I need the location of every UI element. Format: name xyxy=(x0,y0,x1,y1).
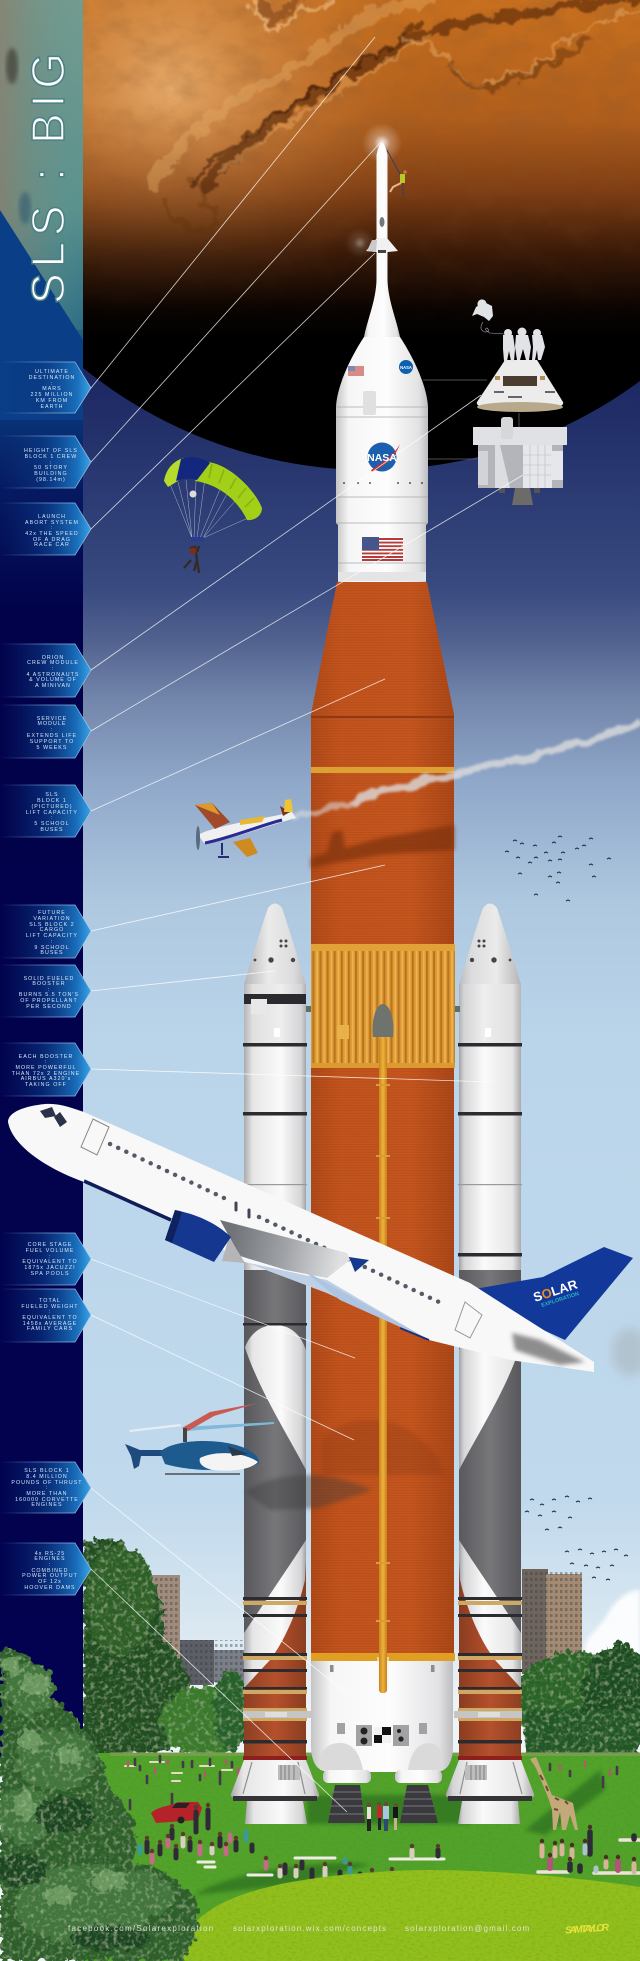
callout: ultimate destination: KM FROM xyxy=(36,398,68,404)
callout: solid fueled booster: BOOSTER xyxy=(32,981,66,987)
callout: solid fueled booster: BURNS 5.5 TON'S xyxy=(19,992,79,998)
callout: total fueled weight: FUELED WEIGHT xyxy=(21,1304,79,1310)
callout: orion crew module: & VOLUME OF xyxy=(29,677,77,683)
callout: launch abort system: RACE CAR xyxy=(34,542,70,548)
footer links: solarxploration.wix.com/concepts xyxy=(233,1924,387,1933)
callout: thrust: : xyxy=(46,1485,48,1491)
callout: solid fueled booster: SOLID FUELED xyxy=(24,976,74,982)
tail fin xyxy=(469,1247,633,1340)
footer links: solarxploration@gmail.com xyxy=(405,1924,530,1933)
callout: each booster: : xyxy=(45,1059,47,1065)
callout: ultimate destination: EARTH xyxy=(40,404,64,410)
tail logo: SOLAR xyxy=(531,1276,580,1305)
distant buildings: right xyxy=(522,1569,582,1674)
callout: launch abort system: : xyxy=(51,525,53,531)
callout: RS-25 engines: ENGINES xyxy=(34,1556,66,1562)
callout: SLS block 1 lift capacity: SLS xyxy=(45,792,59,798)
callout: SLS block 1 lift capacity xyxy=(0,785,91,837)
signature: SAM TAYLOR xyxy=(565,1922,610,1937)
callout: height of SLS: BUILDING xyxy=(34,471,68,477)
foreground tree xyxy=(0,1648,198,1961)
aerobatic plane xyxy=(195,799,296,857)
callout: RS-25 engines: POWER OUTPUT xyxy=(22,1573,78,1579)
small NASA logo: NASA xyxy=(400,365,412,370)
callout: SLS block 1 lift capacity: (PICTURED) xyxy=(31,804,73,810)
callout: thrust: 8.4 MILLION xyxy=(26,1474,68,1480)
large NASA logo: NASA xyxy=(367,452,397,464)
callout: SLS block 1 lift capacity: BLOCK 1 xyxy=(37,798,67,804)
callout: RS-25 engines: : xyxy=(49,1562,51,1568)
plane shadow on core xyxy=(322,1420,445,1475)
booster attachment struts xyxy=(306,1006,460,1012)
gold core band xyxy=(311,1653,455,1661)
callout: height of SLS: : xyxy=(50,460,52,466)
callout: thrust xyxy=(0,1462,91,1513)
sidebar xyxy=(0,0,83,1760)
engine section xyxy=(311,1661,453,1783)
callout: future variation: LIFT CAPACITY xyxy=(26,933,78,939)
callout: ultimate destination: ULTIMATE xyxy=(35,369,69,375)
winglet xyxy=(349,1257,369,1272)
callout: thrust: ENGINES xyxy=(31,1502,63,1508)
callout: launch abort system: OF A DRAG xyxy=(33,537,71,543)
grass field xyxy=(83,1752,640,1961)
helicopter xyxy=(125,1403,274,1474)
callout: ultimate destination: 225 MILLION xyxy=(30,392,74,398)
smoke shadow on core xyxy=(311,825,454,868)
helicopter shadow xyxy=(245,1475,372,1510)
callout: core stage fuel volume: : xyxy=(49,1254,51,1260)
callout: thrust: SLS BLOCK 1 xyxy=(24,1468,70,1474)
giraffe xyxy=(530,1757,578,1830)
service module xyxy=(473,417,567,505)
callout: each booster: EACH BOOSTER xyxy=(19,1054,73,1060)
callout: solid fueled booster: PER SECOND xyxy=(26,1004,72,1010)
booster left black band xyxy=(244,994,306,1014)
astronauts xyxy=(472,299,545,361)
distant buildings: left xyxy=(130,1575,244,1685)
callout: orion crew module: CREW MODULE xyxy=(27,660,79,666)
small NASA logo xyxy=(399,360,413,374)
callout: future variation: SLS BLOCK 2 xyxy=(29,922,75,928)
callout: each booster xyxy=(0,1043,91,1096)
callout: launch abort system xyxy=(0,503,91,555)
callout: SLS block 1 lift capacity: 5 SCHOOL xyxy=(34,821,70,827)
callout: ultimate destination xyxy=(0,362,91,413)
callout: core stage fuel volume: EQUIVALENT TO xyxy=(22,1259,78,1265)
booster right xyxy=(446,904,534,1824)
callout: service module: : xyxy=(51,727,53,733)
background trees xyxy=(83,1540,640,1760)
callout: core stage fuel volume: CORE STAGE xyxy=(28,1242,72,1248)
callout: service module: SUPPORT TO xyxy=(30,739,74,745)
callout: thrust: POUNDS OF THRUST xyxy=(11,1480,83,1486)
callout: solid fueled booster: : xyxy=(48,987,50,993)
callout: each booster: TAKING OFF xyxy=(25,1082,67,1088)
wing xyxy=(220,1220,350,1278)
callout: launch abort system: 42x THE SPEED xyxy=(25,531,79,537)
picnic crowd left xyxy=(140,1805,444,1878)
callout: core stage fuel volume: SPA POOLS xyxy=(30,1271,70,1277)
callout: thrust: MORE THAN xyxy=(26,1491,68,1497)
callout: total fueled weight: TOTAL xyxy=(39,1298,61,1304)
callout: ultimate destination: MARS xyxy=(42,386,62,392)
callout: RS-25 engines: COMBINED xyxy=(32,1568,68,1574)
callout: future variation: : xyxy=(51,939,53,945)
callout: launch abort system: LAUNCH xyxy=(38,514,66,520)
footer links xyxy=(68,1924,530,1933)
launch abort system xyxy=(345,123,402,337)
callout: height of SLS: (98.14m) xyxy=(36,477,66,483)
callout: orion crew module xyxy=(0,644,91,697)
cockpit xyxy=(40,1107,67,1127)
callout: height of SLS: HEIGHT OF SLS xyxy=(24,448,78,454)
callout: service module xyxy=(0,705,91,758)
rocket core stage xyxy=(245,582,455,1823)
distant crowd xyxy=(118,1756,617,1846)
callout: RS-25 engines: 4x RS-25 xyxy=(35,1551,65,1557)
core engines xyxy=(328,1785,438,1823)
callout: core stage fuel volume: FUEL VOLUME xyxy=(26,1248,74,1254)
callout: total fueled weight: : xyxy=(49,1309,51,1315)
callout: launch abort system: ABORT SYSTEM xyxy=(25,520,79,526)
callout: each booster: THAN 72x 2 ENGINE xyxy=(12,1071,80,1077)
callout: thrust: 160000 CORVETTE xyxy=(15,1497,79,1503)
callout: RS-25 engines: HOOVER DAMS xyxy=(24,1585,76,1591)
flock of birds: lower xyxy=(525,1496,628,1580)
callout: future variation: FUTURE xyxy=(38,910,66,916)
callout: service module: MODULE xyxy=(38,721,66,727)
callout: RS-25 engines: OF 12x xyxy=(38,1579,62,1585)
callout: orion crew module: ORION xyxy=(42,655,64,661)
callout: height of SLS: BLOCK 1 CREW xyxy=(25,454,77,460)
booster left xyxy=(231,904,319,1824)
callout: future variation xyxy=(0,905,91,958)
callout: each booster: AIRBUS A320's xyxy=(21,1076,71,1082)
callout: solid fueled booster: OF PROPELLANT xyxy=(20,998,78,1004)
cloud xyxy=(585,1590,640,1655)
foreground hill xyxy=(175,1870,640,1961)
callout: orion crew module: 4 ASTRONAUTS xyxy=(27,672,79,678)
leader lines xyxy=(91,37,523,1812)
callout: future variation: CARGO xyxy=(40,927,64,933)
airliner xyxy=(8,1104,633,1372)
feedline xyxy=(373,1004,393,1693)
tail logo: EXPLORATION xyxy=(541,1291,580,1309)
callout: height of SLS: 50 STORY xyxy=(34,465,68,471)
callout: SLS block 1 lift capacity: : xyxy=(51,815,53,821)
planet Mars xyxy=(83,0,640,469)
footer links: facebook.com/Solarexploration xyxy=(68,1924,214,1933)
callout: solid fueled booster xyxy=(0,965,91,1017)
callout: RS-25 engines xyxy=(0,1543,91,1595)
shadows on the grass xyxy=(195,1770,605,1895)
callout: future variation: 9 SCHOOL xyxy=(34,945,70,951)
callout: future variation: VARIATION xyxy=(33,916,71,922)
haze by tail xyxy=(612,1328,640,1376)
callout: total fueled weight xyxy=(0,1289,91,1342)
callout: each booster: MORE POWERFUL xyxy=(15,1065,77,1071)
door xyxy=(81,1119,109,1155)
title: SLS : BIG xyxy=(22,53,74,304)
fuselage xyxy=(8,1104,594,1372)
picnic crowd right xyxy=(538,1827,640,1873)
callout: SLS block 1 lift capacity: LIFT CAPACITY xyxy=(26,810,78,816)
large NASA logo xyxy=(367,442,400,472)
callout: height of SLS xyxy=(0,436,91,488)
climber on the abort system xyxy=(387,150,407,196)
callout: ultimate destination: DESTINATION xyxy=(29,375,75,381)
flock of birds: upper xyxy=(505,836,611,901)
callout: core stage fuel volume: 1875x JACUZZI xyxy=(24,1265,76,1271)
callout: SLS block 1 lift capacity: BUSES xyxy=(40,827,64,833)
callout: orion crew module: : xyxy=(52,666,54,672)
callout: future variation: BUSES xyxy=(40,950,64,956)
callout: total fueled weight: 1458x AVERAGE xyxy=(23,1321,77,1327)
callout: service module: 5 WEEKS xyxy=(37,745,67,751)
rear fuselage grime xyxy=(512,1333,585,1365)
callout: total fueled weight: EQUIVALENT TO xyxy=(22,1315,78,1321)
windows xyxy=(110,1144,439,1302)
large US flag xyxy=(362,537,403,561)
intertank ribs xyxy=(311,944,455,1068)
callout: service module: EXTENDS LIFE xyxy=(27,733,77,739)
people beside the rocket xyxy=(367,1802,398,1831)
callout: orion crew module: A MINIVAN xyxy=(35,683,71,689)
connector lines to exploded capsule xyxy=(423,380,519,459)
Orion capsule xyxy=(477,360,563,412)
callout: core stage fuel volume xyxy=(0,1233,91,1285)
crew module fairing xyxy=(336,337,428,582)
callout: service module: SERVICE xyxy=(37,716,67,722)
red sports car xyxy=(151,1802,202,1824)
callout: total fueled weight: FAMILY CARS xyxy=(27,1326,73,1332)
parachute xyxy=(164,457,262,573)
smoke trail xyxy=(293,722,640,815)
callout: ultimate destination: : xyxy=(51,381,53,387)
small US flag xyxy=(348,366,364,376)
engine xyxy=(165,1210,245,1263)
